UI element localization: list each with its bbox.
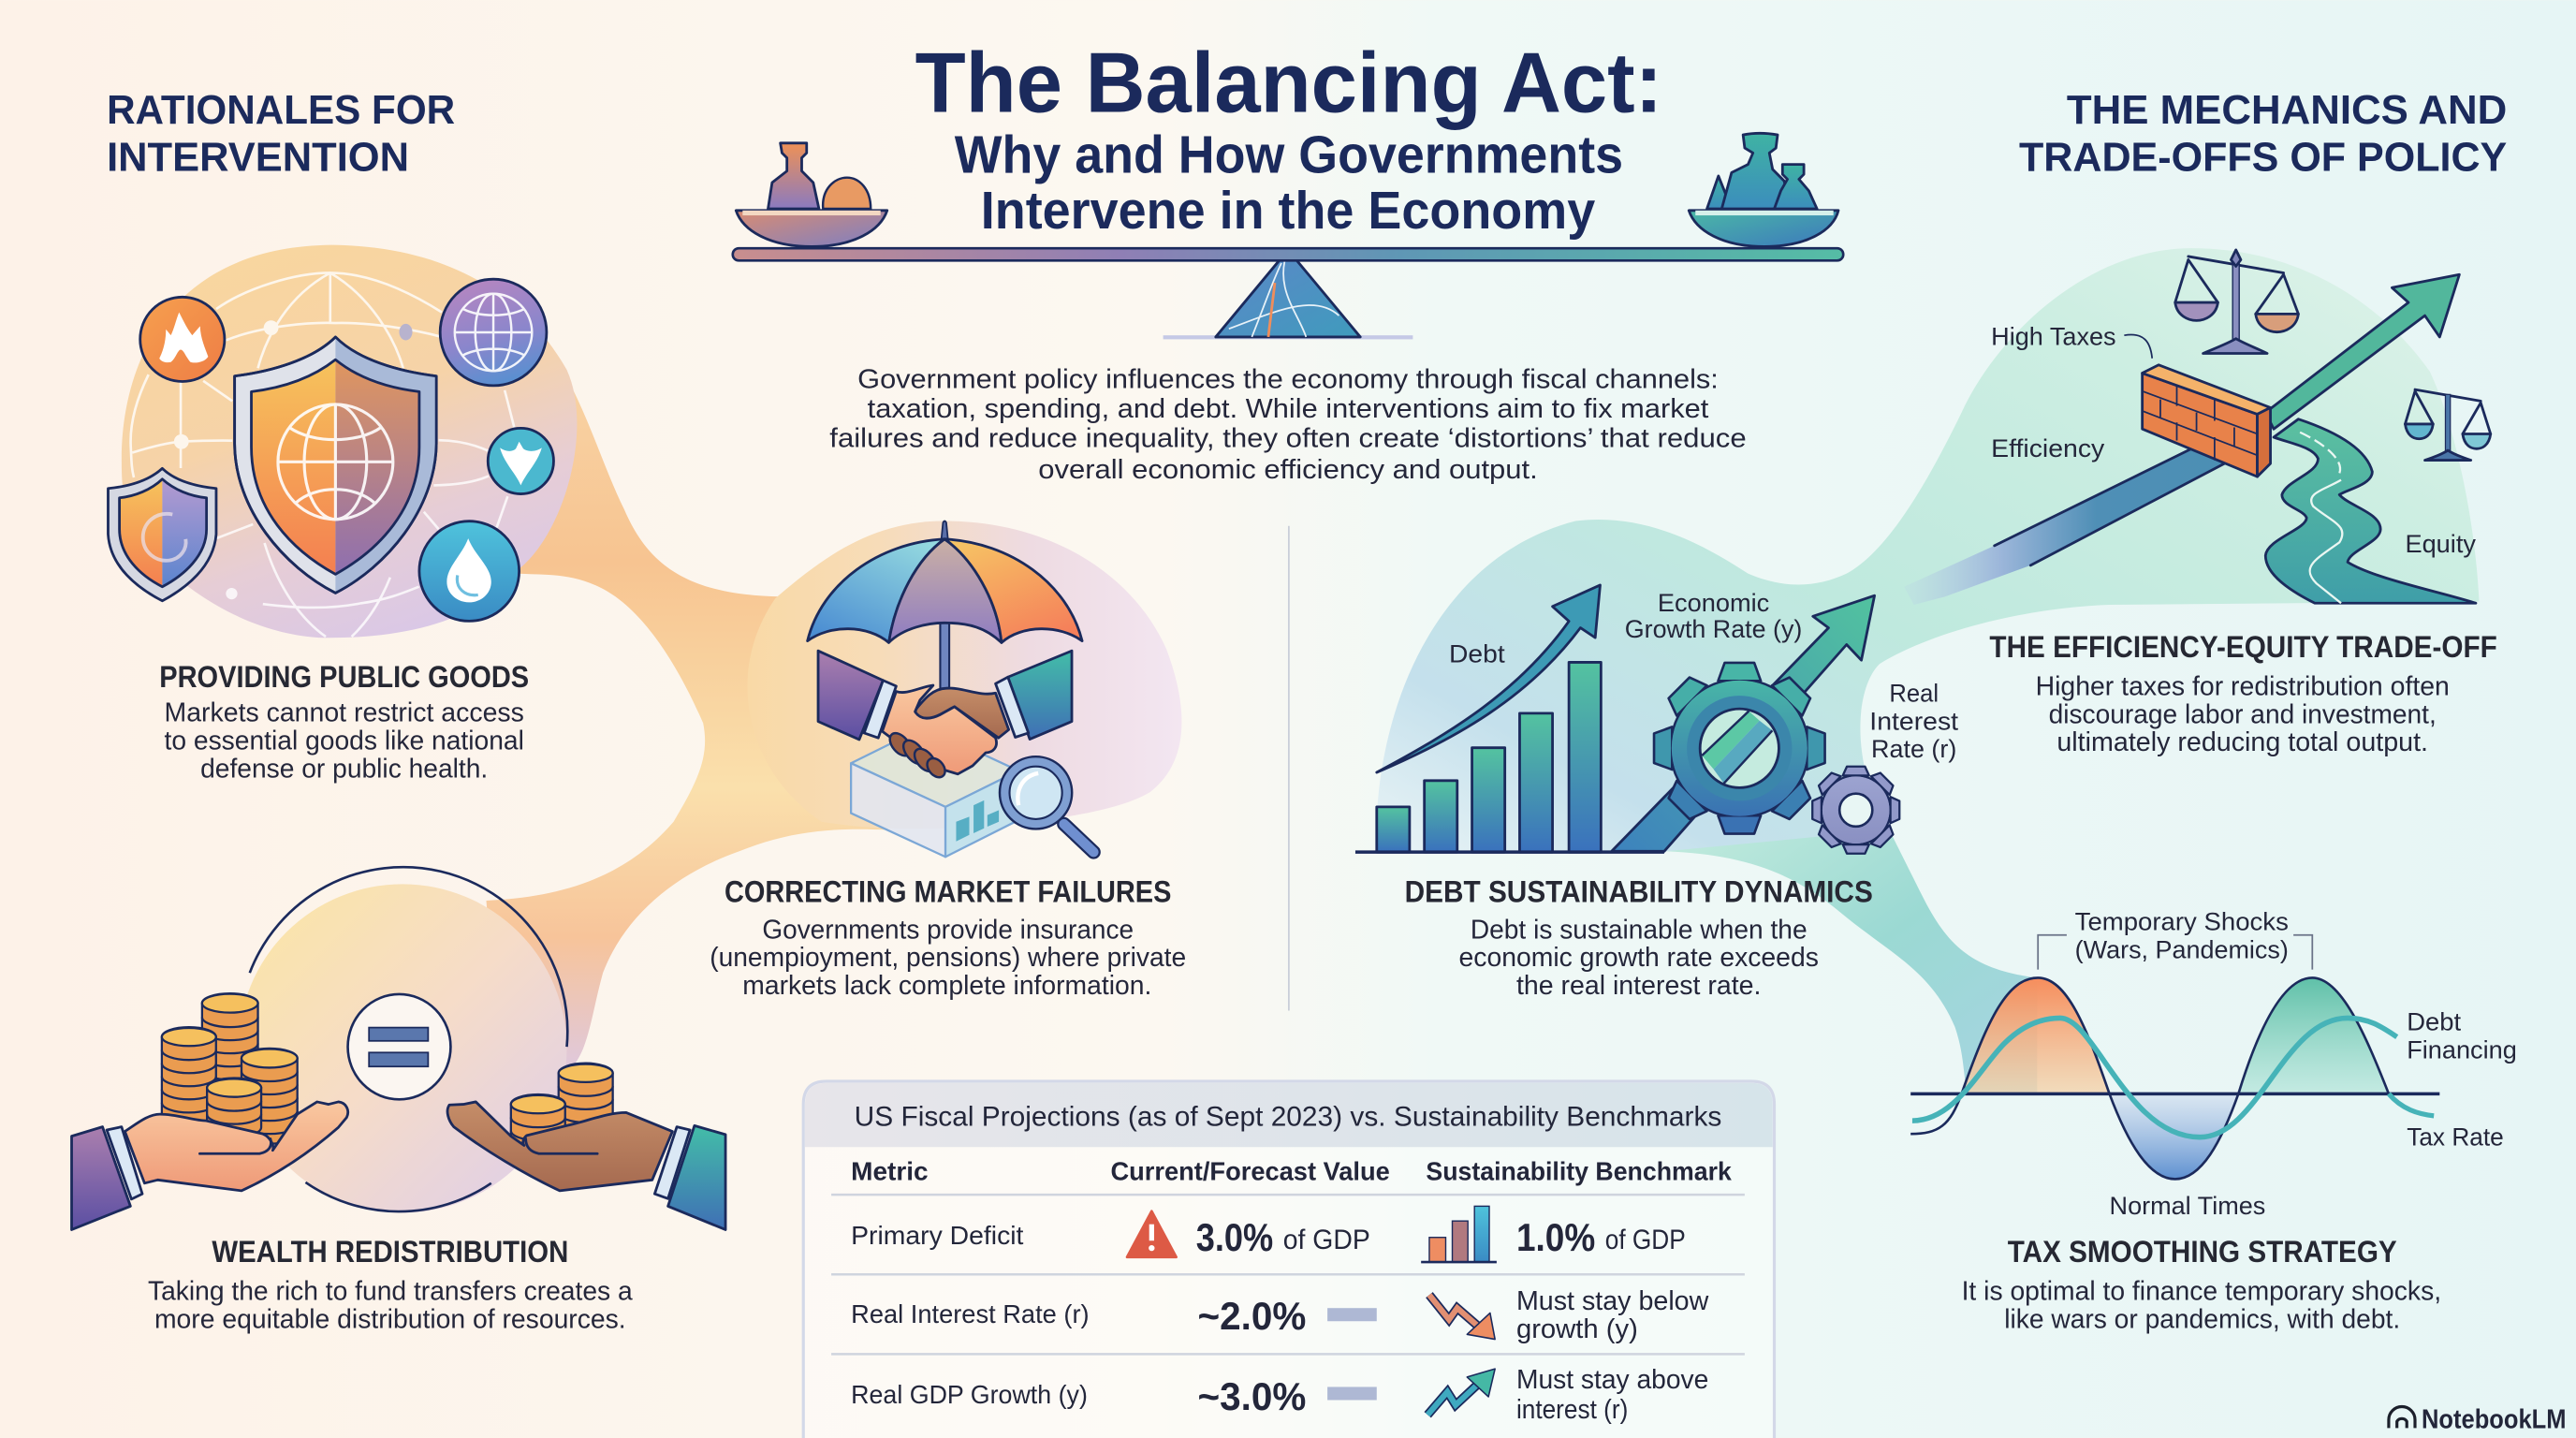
text: tax smoothing strategy xyxy=(1962,1276,2441,1334)
icon: globe network xyxy=(131,272,514,637)
label: debt financing xyxy=(2407,1007,2517,1064)
icon: bar benchmark xyxy=(1421,1206,1497,1262)
column headers: Current/Forecast Value xyxy=(1110,1156,1390,1185)
row: real interest rate: growth (y) xyxy=(1516,1314,1638,1344)
heading: debt sustainability dynamics: DEBT SUSTAINABILITY DYNAMICS xyxy=(1405,875,1873,909)
heading: mechanics and trade-offs: TRADE-OFFS OF POLICY xyxy=(2019,135,2507,181)
left bowl with weights xyxy=(736,143,887,246)
heading: rationales for intervention: INTERVENTION xyxy=(107,135,409,181)
row: real interest rate: Real Interest Rate (r) xyxy=(851,1299,1090,1328)
label: economic growth rate xyxy=(1625,588,1802,643)
icon: flame circle xyxy=(140,297,225,382)
text: debt sustainability dynamics xyxy=(1459,915,1819,1001)
label: real interest rate: Rate (r) xyxy=(1871,734,1956,763)
text: debt sustainability dynamics: the real interest rate. xyxy=(1516,971,1761,1001)
label: debt financing: Financing xyxy=(2407,1034,2517,1064)
arrow: growth rate xyxy=(1612,595,1875,851)
icon: left coin stacks xyxy=(162,993,298,1144)
intro text block: failures and reduce inequality, they often create ‘distortions’ that reduce xyxy=(829,424,1747,454)
text: efficiency-equity trade-off: Higher taxes for redistribution often xyxy=(2036,672,2450,702)
icon: balance scale xyxy=(733,133,1843,339)
label: temporary shocks bracket xyxy=(2038,907,2312,970)
label: temporary shocks bracket: Temporary Shocks xyxy=(2075,907,2289,936)
row: real interest rate xyxy=(851,1286,1708,1344)
icon: small scales xyxy=(2405,389,2491,461)
panel: flowing background shapes left xyxy=(122,245,1181,1212)
table title bar: US Fiscal Projections (as of Sept 2023) vs. Sustainability Benchmarks xyxy=(855,1101,1721,1132)
panel: tax smoothing strategy xyxy=(1910,907,2517,1334)
heading: mechanics and trade-offs: THE MECHANICS AND xyxy=(2067,87,2507,133)
icon: magnifying glass xyxy=(1000,756,1093,852)
label: debt financing: Debt xyxy=(2407,1007,2462,1036)
label: high taxes: High Taxes xyxy=(1991,322,2116,351)
label: real interest rate: Real xyxy=(1889,679,1939,708)
text: tax smoothing strategy: It is optimal to finance temporary shocks, xyxy=(1962,1276,2441,1306)
text: correcting market failures: (unempioyment, pensions) where private xyxy=(710,943,1186,973)
text: wealth redistribution xyxy=(148,1276,634,1334)
table background xyxy=(803,1081,1775,1438)
title: The Balancing Act: xyxy=(915,35,1662,130)
arrow: debt curve xyxy=(1377,585,1600,772)
icon: left hand and sleeve xyxy=(72,1102,348,1229)
icon: down arrow xyxy=(1429,1295,1495,1340)
row: primary deficit: Primary Deficit xyxy=(851,1221,1024,1250)
title xyxy=(915,35,1662,240)
panel: providing public goods xyxy=(108,272,553,784)
heading: tax smoothing strategy: TAX SMOOTHING STRATEGY xyxy=(2008,1235,2397,1269)
heading: correcting market failures: CORRECTING MARKET FAILURES xyxy=(724,875,1171,909)
icon: right coin stacks xyxy=(511,1064,613,1151)
label: high taxes xyxy=(1991,322,2152,359)
row: real GDP growth xyxy=(851,1365,1708,1425)
title: Why and How Governments xyxy=(955,125,1623,183)
text: providing public goods: Markets cannot restrict access xyxy=(165,698,524,728)
row: real GDP growth: ~3.0% xyxy=(1197,1374,1306,1418)
panel: wealth redistribution xyxy=(72,867,725,1334)
text: debt sustainability dynamics: economic growth rate exceeds xyxy=(1459,943,1819,973)
icon: brick wall xyxy=(2143,365,2271,477)
right bowl with weights xyxy=(1689,133,1838,246)
circle outline xyxy=(250,867,567,1211)
label: normal times: Normal Times xyxy=(2110,1191,2265,1220)
row: real GDP growth: Must stay above xyxy=(1516,1365,1708,1395)
column headers: Metric xyxy=(851,1156,929,1185)
icon: small shield xyxy=(108,468,216,601)
row: real interest rate: Must stay below xyxy=(1516,1286,1708,1316)
label: equity: Equity xyxy=(2405,529,2476,558)
icon: teal badge xyxy=(488,428,553,494)
label: real interest rate: Interest xyxy=(1869,706,1959,735)
row: real interest rate: ~2.0% xyxy=(1197,1294,1306,1338)
chart: debt financing and tax rate waves xyxy=(1910,977,2439,1179)
intro text block: taxation, spending, and debt. While interventions aim to fix market xyxy=(868,394,1708,424)
row: primary deficit: of GDP xyxy=(1605,1225,1686,1255)
heading: wealth redistribution: WEALTH REDISTRIBUTION xyxy=(212,1235,568,1269)
icon: umbrella xyxy=(808,521,1082,692)
text: debt sustainability dynamics: Debt is sustainable when the xyxy=(1471,915,1808,945)
panel: correcting market failures xyxy=(710,521,1186,1001)
row: primary deficit: 1.0% xyxy=(1516,1215,1595,1259)
bar chart: debt growth xyxy=(1377,662,1601,852)
label: economic growth rate: Economic xyxy=(1658,588,1769,617)
icon: up arrow xyxy=(1427,1369,1495,1415)
icon: small gear xyxy=(1812,767,1899,854)
label: real interest rate xyxy=(1869,679,1959,763)
arrow: efficiency path xyxy=(1904,274,2459,605)
heading: rationales for intervention xyxy=(107,87,455,181)
icon: warning triangle xyxy=(1127,1211,1177,1257)
fulcrum base line xyxy=(1164,335,1412,339)
title: Intervene in the Economy xyxy=(981,181,1595,240)
panel: US fiscal projections table xyxy=(803,1081,1775,1438)
row: real GDP growth: Real GDP Growth (y) xyxy=(851,1380,1088,1409)
text: providing public goods: to essential goods like national xyxy=(165,726,524,756)
text: tax smoothing strategy: like wars or pandemics, with debt. xyxy=(2004,1304,2400,1334)
icon: purple globe circle xyxy=(440,279,547,386)
label: efficiency: Efficiency xyxy=(1991,433,2105,462)
label: tax rate: Tax Rate xyxy=(2407,1122,2504,1151)
text: efficiency-equity trade-off xyxy=(2036,672,2450,757)
icon: handshake xyxy=(818,651,1072,781)
heading: rationales for intervention: RATIONALES FOR xyxy=(107,87,455,133)
intro text block: Government policy influences the economy through fiscal channels: xyxy=(857,364,1719,394)
text: wealth redistribution: Taking the rich to fund transfers creates a xyxy=(148,1276,634,1306)
text: efficiency-equity trade-off: discourage labor and investment, xyxy=(2049,699,2437,729)
text: wealth redistribution: more equitable distribution of resources. xyxy=(154,1304,626,1334)
row: primary deficit: 3.0% xyxy=(1196,1215,1273,1259)
text: providing public goods xyxy=(165,698,524,784)
column headers xyxy=(851,1156,1732,1185)
label: debt: Debt xyxy=(1449,638,1505,668)
icon: water drop xyxy=(419,521,520,621)
text: providing public goods: defense or public health. xyxy=(200,754,488,784)
icon: data box xyxy=(851,727,1018,857)
panel: debt sustainability dynamics xyxy=(1355,585,1959,1001)
row: primary deficit xyxy=(851,1206,1686,1262)
row: real GDP growth: interest (r) xyxy=(1516,1395,1628,1425)
icon: large gear xyxy=(1654,663,1825,834)
intro text block xyxy=(829,364,1747,485)
icon: right hand and sleeve xyxy=(447,1102,725,1229)
intro text block: overall economic efficiency and output. xyxy=(1038,455,1538,485)
label: economic growth rate: Growth Rate (y) xyxy=(1625,614,1802,643)
panel: efficiency-equity trade-off xyxy=(1904,250,2497,757)
heading: providing public goods: PROVIDING PUBLIC GOODS xyxy=(159,660,529,694)
column headers: Sustainability Benchmark xyxy=(1426,1156,1732,1185)
icon: equals sign xyxy=(348,994,450,1099)
table title bar xyxy=(805,1083,1773,1147)
row: primary deficit: of GDP xyxy=(1283,1225,1370,1255)
text: correcting market failures: Governments provide insurance xyxy=(762,915,1134,945)
icon: winding road xyxy=(2265,419,2476,603)
text: correcting market failures: markets lack complete information. xyxy=(742,971,1151,1001)
beam xyxy=(733,248,1843,260)
fulcrum triangle xyxy=(1216,250,1360,337)
label: temporary shocks bracket: (Wars, Pandemics) xyxy=(2075,934,2289,963)
icon: large shield with globe xyxy=(235,337,436,593)
heading: mechanics and trade-offs xyxy=(2019,87,2507,181)
heading: efficiency-equity trade-off: THE EFFICIENCY-EQUITY TRADE-OFF xyxy=(1989,630,2497,664)
text: correcting market failures xyxy=(710,915,1186,1001)
panel: flowing background shapes right xyxy=(1376,248,2479,1093)
text: efficiency-equity trade-off: ultimately reducing total output. xyxy=(2056,727,2428,757)
icon: large scales xyxy=(2175,250,2298,353)
